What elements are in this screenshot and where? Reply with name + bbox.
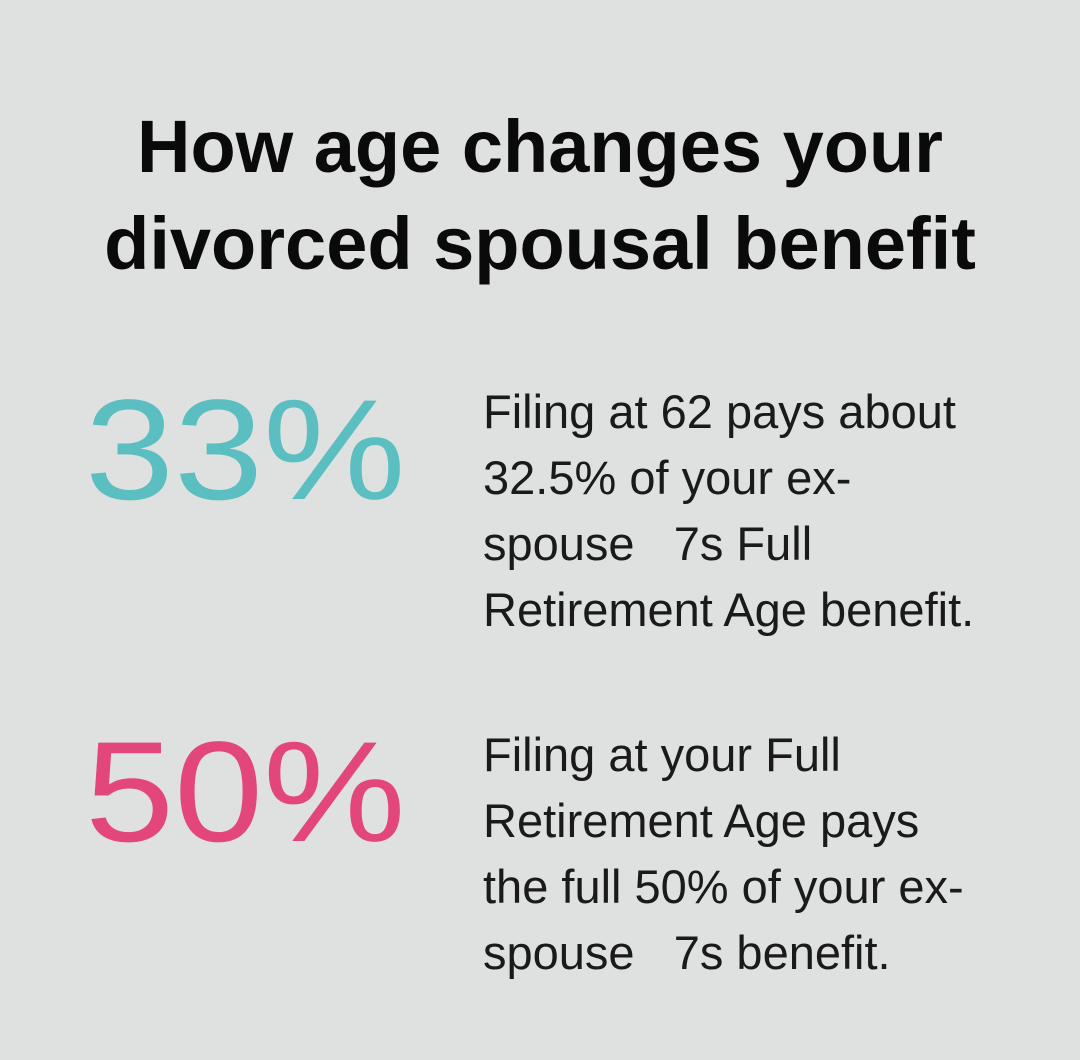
stat: 50%: 50% bbox=[85, 713, 406, 872]
text: filing at 62: Filing at 62 pays about bbox=[483, 385, 956, 438]
text: filing at FRA bbox=[483, 728, 964, 979]
text: filing at 62: Retirement Age benefit. bbox=[483, 583, 974, 636]
text: filing at 62: spouse 7s Full bbox=[483, 517, 812, 570]
title: How age changes your bbox=[137, 105, 943, 188]
text: filing at FRA: Retirement Age pays bbox=[483, 794, 919, 847]
text: filing at FRA: spouse 7s benefit. bbox=[483, 926, 891, 979]
text: filing at 62 bbox=[483, 385, 974, 636]
text: filing at FRA: the full 50% of your ex- bbox=[483, 860, 964, 913]
text: filing at 62: 32.5% of your ex- bbox=[483, 451, 851, 504]
stat: 33%: 33% bbox=[85, 371, 406, 530]
title bbox=[104, 105, 976, 285]
text: filing at FRA: Filing at your Full bbox=[483, 728, 841, 781]
title: divorced spousal benefit bbox=[104, 202, 976, 285]
